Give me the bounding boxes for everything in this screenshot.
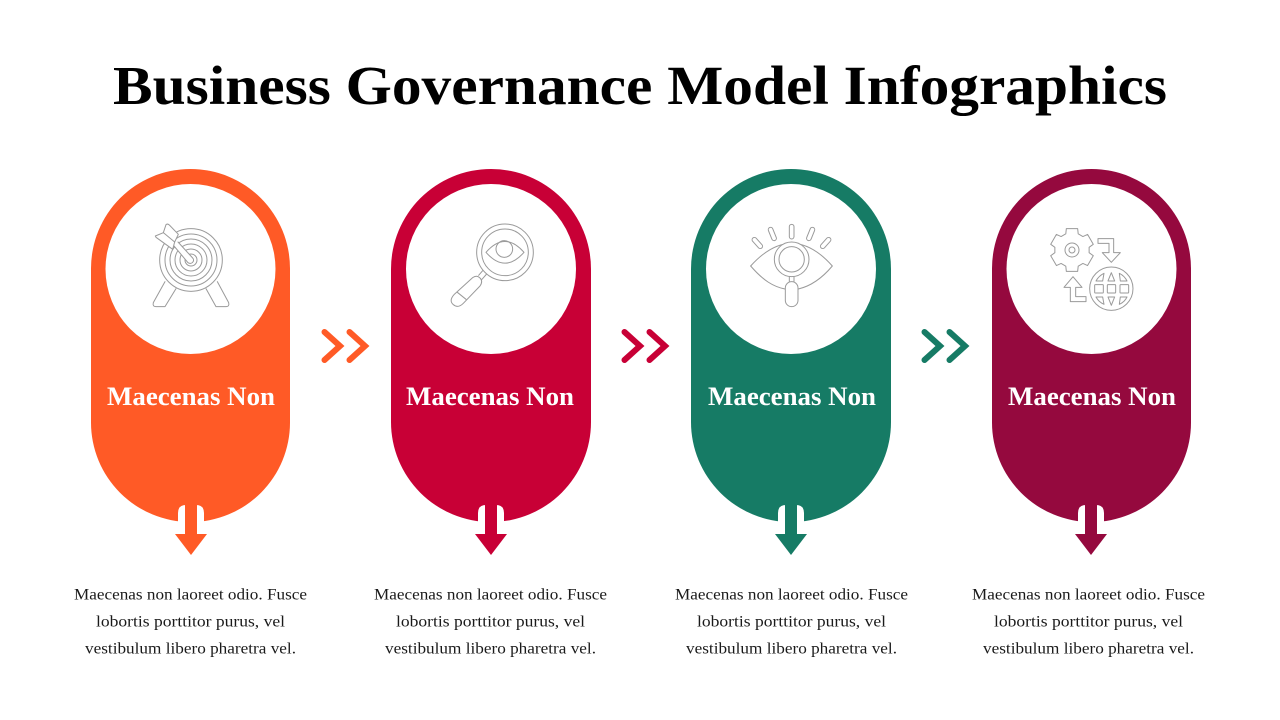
description 3 (675, 586, 908, 658)
description 1: lobortis porttitor purus, vel (96, 614, 286, 630)
description 3: Maecenas non laoreet odio. Fusce (675, 586, 908, 604)
step heading 4: Maecenas Non (1008, 381, 1176, 411)
icon: target with dart (153, 224, 229, 307)
pill shape 4 (992, 169, 1191, 522)
step heading 1: Maecenas Non (107, 381, 275, 411)
pill shape 2 (391, 169, 591, 522)
icon: eye with magnifier (751, 224, 832, 307)
title: Business Governance Model Infographics (113, 55, 1167, 116)
panel: step 2 red (391, 169, 591, 555)
description 4: vestibulum libero pharetra vel. (983, 640, 1194, 658)
icon circle 4 (1006, 184, 1176, 354)
description 1: Maecenas non laoreet odio. Fusce (74, 586, 307, 604)
description 3: vestibulum libero pharetra vel. (686, 640, 897, 658)
description 4: lobortis porttitor purus, vel (994, 614, 1184, 630)
icon: magnifier with eye (451, 224, 533, 306)
arrow: chevrons 1 (324, 332, 365, 360)
icon circle 1 (106, 184, 276, 354)
step heading 2: Maecenas Non (406, 381, 574, 411)
down arrow 2 (475, 505, 507, 555)
step heading 3: Maecenas Non (708, 381, 876, 411)
description 2: lobortis porttitor purus, vel (396, 614, 586, 630)
pill shape 1 (91, 169, 290, 522)
panel: step 3 green (691, 169, 891, 555)
description 2: Maecenas non laoreet odio. Fusce (374, 586, 607, 604)
icon: gear, globe and arrows (1051, 229, 1133, 310)
down arrow 3 (775, 505, 807, 555)
down arrow 4 (1075, 505, 1107, 555)
panel: step 4 maroon (992, 169, 1191, 555)
description 1: vestibulum libero pharetra vel. (85, 640, 296, 658)
icon circle 3 (706, 184, 876, 354)
description 1 (74, 586, 307, 658)
description 2: vestibulum libero pharetra vel. (385, 640, 596, 658)
panel: step 1 orange (91, 169, 290, 555)
description 2 (374, 586, 607, 658)
arrow: chevrons 3 (924, 332, 965, 360)
icon circle 2 (406, 184, 576, 354)
description 4: Maecenas non laoreet odio. Fusce (972, 586, 1205, 604)
description 3: lobortis porttitor purus, vel (697, 614, 887, 630)
description 4 (972, 586, 1205, 658)
pill shape 3 (691, 169, 891, 522)
arrow: chevrons 2 (624, 332, 665, 360)
down arrow 1 (175, 505, 207, 555)
